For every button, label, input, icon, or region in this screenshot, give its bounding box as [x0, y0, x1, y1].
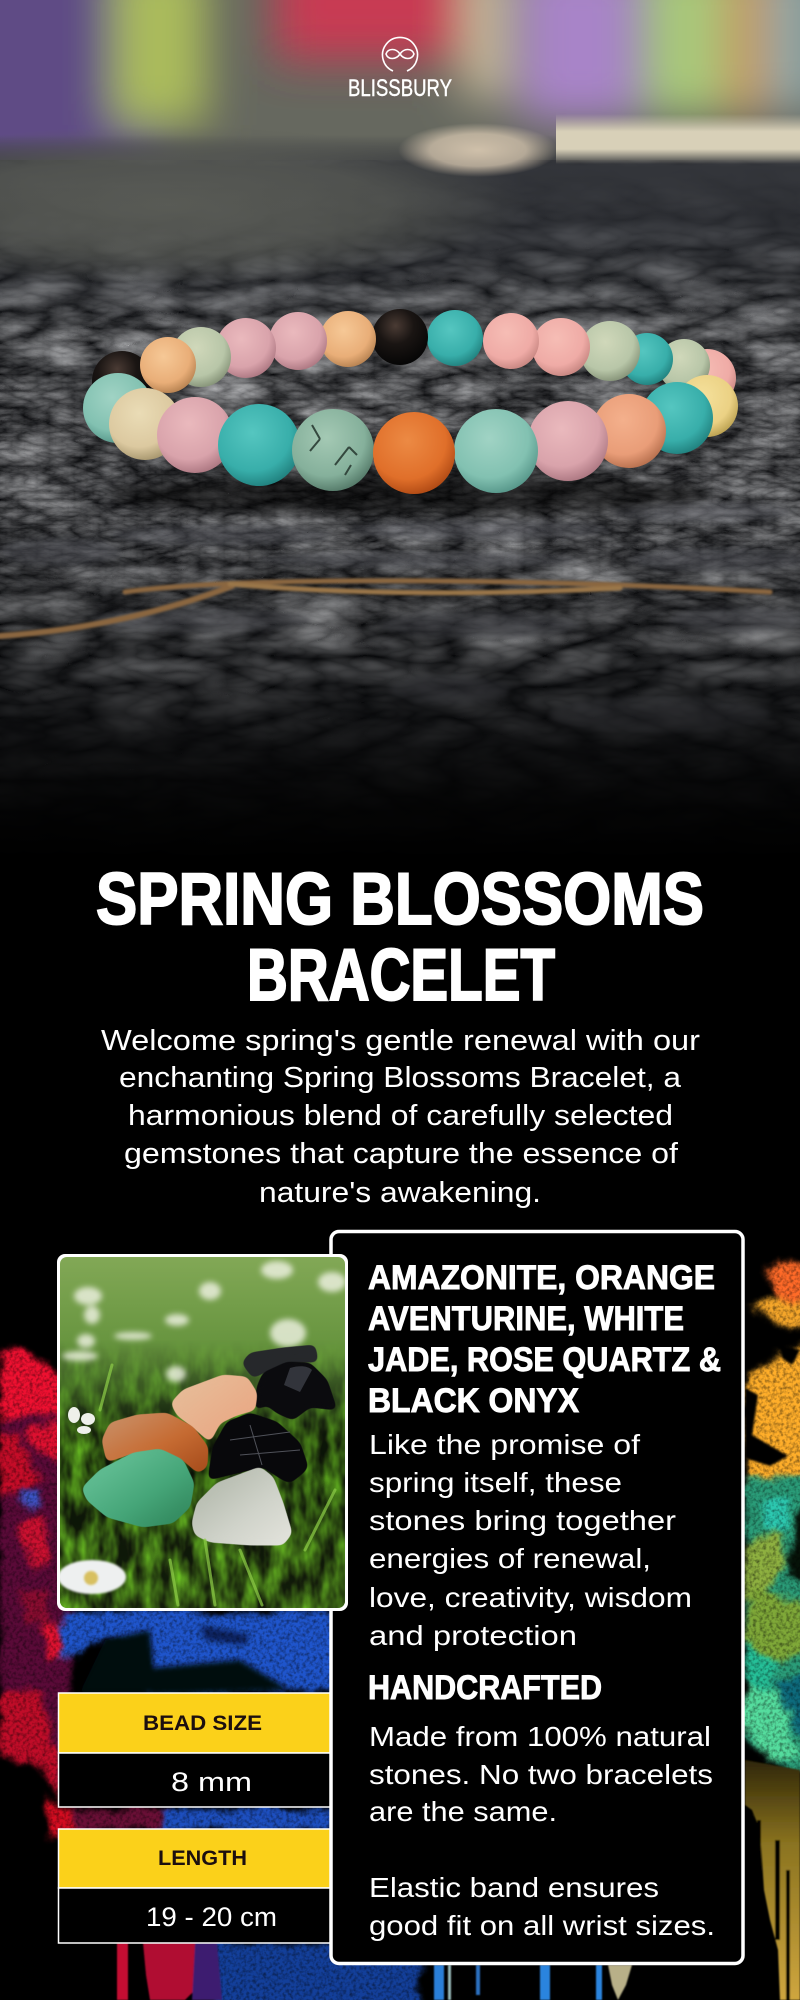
green and teal body — [745, 1476, 800, 1770]
heading: stones: BLACK ONYX — [368, 1382, 579, 1420]
title: BRACELET — [247, 935, 555, 1016]
pavement strip in the distance — [398, 114, 800, 177]
heading: handcrafted: HANDCRAFTED — [368, 1669, 602, 1707]
label text: LENGTH — [158, 1847, 247, 1870]
bracelet — [83, 309, 738, 515]
brand name: BLISSBURY — [348, 75, 452, 102]
grass blades — [100, 1365, 335, 1605]
stones description: and protection — [369, 1620, 577, 1651]
handcrafted description: are the same. — [369, 1796, 557, 1827]
lighter cobble patches — [0, 502, 800, 733]
stones description: stones bring together — [369, 1505, 676, 1536]
handcrafted description — [369, 1721, 715, 1941]
logo mark — [382, 37, 418, 71]
product photo: tumbled gemstones on grass — [57, 1254, 348, 1611]
intro paragraph: Welcome spring's gentle renewal with our — [101, 1025, 700, 1057]
gold drips — [745, 1760, 800, 2000]
intro paragraph: harmonious blend of carefully selected — [128, 1100, 673, 1132]
handcrafted description: good fit on all wrist sizes. — [369, 1910, 715, 1941]
label cell — [58, 1693, 330, 1753]
dark patches in the blue — [80, 1625, 290, 1695]
value text: 8 mm — [171, 1767, 252, 1797]
stones description: energies of renewal, — [369, 1543, 651, 1574]
gemstones — [82, 1345, 337, 1545]
value text: 19 - 20 cm — [146, 1902, 277, 1932]
asphalt ground — [0, 125, 800, 865]
title — [96, 859, 704, 1016]
hero photo: bracelet on dark asphalt — [0, 0, 800, 865]
orange and red top — [748, 1262, 800, 1485]
heading: stones — [368, 1259, 721, 1420]
brand logo — [348, 37, 452, 102]
spec table: length — [58, 1829, 330, 1943]
value cell — [58, 1753, 330, 1807]
stones description — [369, 1429, 692, 1651]
blurred colourful backdrop — [0, 0, 800, 160]
heading: stones: JADE, ROSE QUARTZ & — [368, 1341, 721, 1379]
blue paint splash — [62, 1612, 420, 2000]
blurred background flowers — [62, 1261, 346, 1382]
heading: stones: AMAZONITE, ORANGE — [368, 1259, 715, 1297]
right paint splash — [745, 1262, 800, 2000]
label cell — [58, 1829, 330, 1888]
intro paragraph: nature's awakening. — [259, 1177, 541, 1209]
heading: stones: AVENTURINE, WHITE — [368, 1300, 684, 1338]
bottom paint drips — [117, 1943, 632, 2000]
intro paragraph: enchanting Spring Blossoms Bracelet, a — [119, 1062, 682, 1094]
value cell — [58, 1888, 330, 1943]
daisies — [68, 1407, 95, 1434]
left paint splash — [0, 1346, 170, 1838]
black blotches — [745, 1345, 800, 1466]
spec table: bead size — [58, 1693, 330, 1807]
stones description: spring itself, these — [369, 1467, 622, 1498]
label text: BEAD SIZE — [143, 1712, 262, 1735]
intro paragraph: gemstones that capture the essence of — [124, 1138, 679, 1170]
panel: stone details — [331, 1232, 743, 1964]
stones description: love, creativity, wisdom — [369, 1582, 692, 1613]
handcrafted description: Elastic band ensures — [369, 1872, 659, 1903]
title: SPRING BLOSSOMS — [96, 859, 704, 940]
pine needles — [0, 581, 770, 636]
handcrafted description: stones. No two bracelets — [369, 1759, 713, 1790]
intro paragraph — [101, 1025, 700, 1209]
handcrafted description: Made from 100% natural — [369, 1721, 711, 1752]
stones description: Like the promise of — [369, 1429, 640, 1460]
